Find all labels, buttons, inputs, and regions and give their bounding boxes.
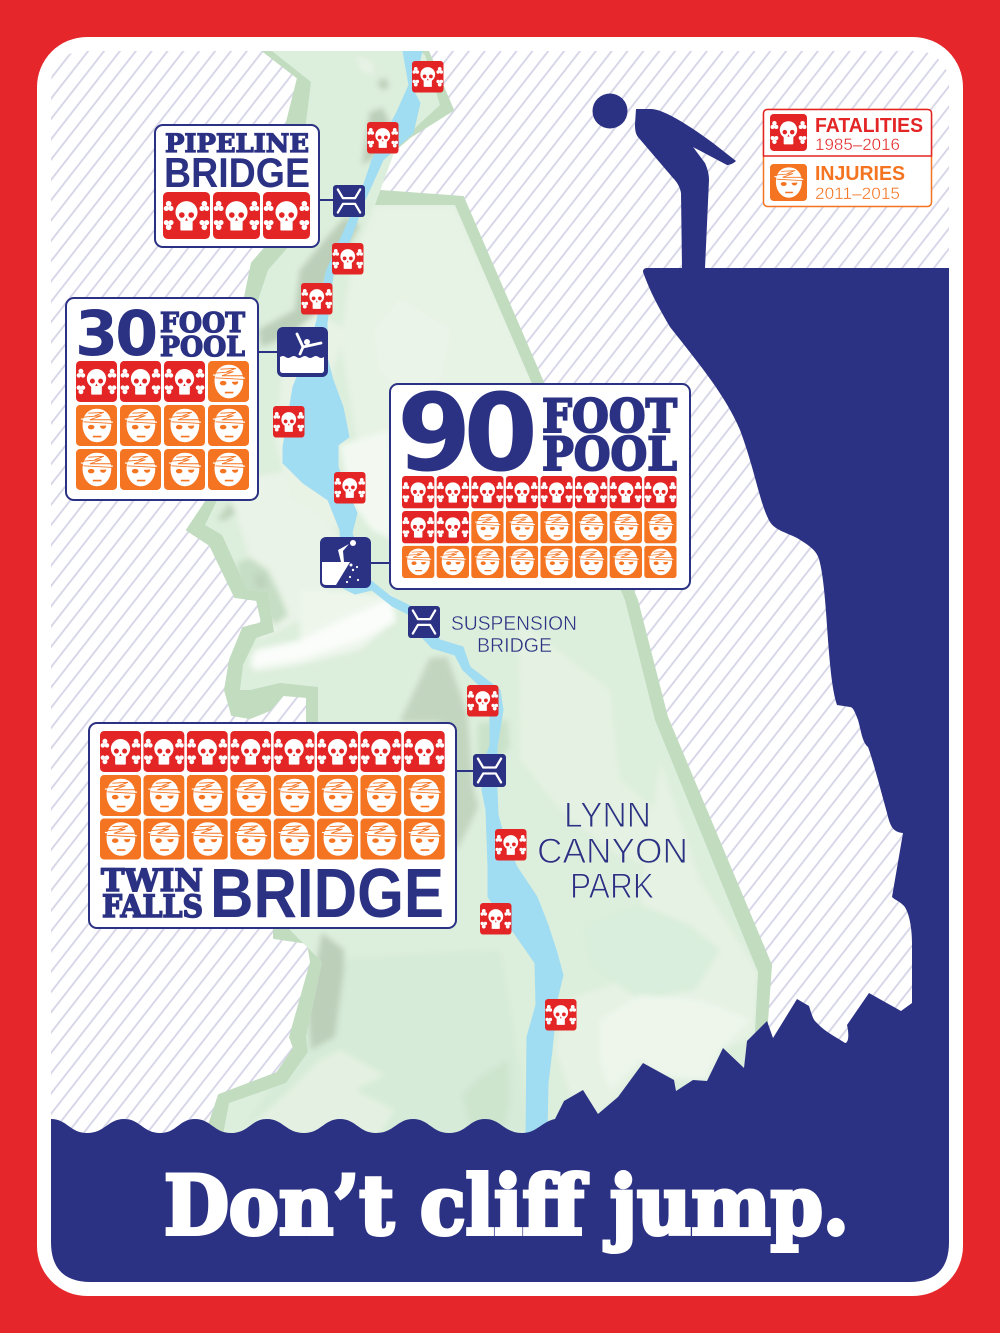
- heading: 30: 30: [75, 297, 156, 370]
- heading: Bridge: BRIDGE: [164, 149, 310, 196]
- connector: 30 Foot Pool: [258, 351, 278, 353]
- label: Lynn Canyon Park: [537, 796, 688, 906]
- icon: swimmer in pool: [277, 327, 328, 377]
- icon: Suspension Bridge marker: [408, 606, 440, 638]
- title: Don’t cliff jump.: [164, 1159, 849, 1254]
- connector: 90 Foot Pool: [371, 562, 391, 564]
- icons: 8 fatalities and 16 injuries: [100, 731, 445, 860]
- icon: cliff diver: [320, 537, 371, 588]
- hatched sky background: [51, 51, 949, 1151]
- legend fatalities years: 1985–2016: [815, 136, 900, 154]
- connector: Pipeline Bridge: [319, 199, 334, 201]
- label: Suspension Bridge: SUSPENSION: [451, 613, 577, 635]
- legend injuries years: 2011–2015: [815, 185, 900, 203]
- label: Lynn Canyon Park: CANYON: [537, 832, 688, 871]
- icons: 3 fatalities and 9 injuries: [76, 361, 249, 490]
- panel: 90 Foot Pool: [390, 372, 690, 589]
- label: Suspension Bridge: BRIDGE: [477, 635, 552, 657]
- heading: Falls: FALLS: [102, 889, 203, 925]
- heading: Pipeline: PIPELINE: [165, 129, 309, 158]
- heading: Bridge: BRIDGE: [210, 854, 444, 932]
- legend injuries label: INJURIES: [815, 163, 905, 185]
- icon: Pipeline Bridge marker: [333, 185, 365, 217]
- connector: Twin Falls Bridge: [456, 770, 474, 772]
- heading: 90: 90: [397, 372, 533, 496]
- label: Lynn Canyon Park: LYNN: [564, 796, 651, 835]
- icons: 3 fatalities: [163, 192, 310, 239]
- heading: Pool: POOL: [542, 427, 677, 481]
- legend fatalities icon: [770, 114, 807, 151]
- legend fatalities label: FATALITIES: [815, 115, 923, 137]
- icons: 10 fatalities and 14 injuries: [402, 476, 677, 578]
- heading: Foot: FOOT: [160, 308, 245, 339]
- scattered fatality markers along the river: [273, 61, 576, 1030]
- icon: Twin Falls Bridge marker: [473, 754, 506, 787]
- panel: Pipeline Bridge: [155, 125, 319, 247]
- panel: 30 Foot Pool: [66, 297, 258, 500]
- cliff, rocks and water silhouette: [51, 268, 949, 1282]
- river: [283, 51, 563, 1134]
- heading: Pool: POOL: [160, 332, 245, 363]
- label: Lynn Canyon Park: PARK: [570, 867, 654, 906]
- panel: Twin Falls Bridge: [89, 723, 456, 932]
- map: Lynn Canyon Park terrain: [187, 51, 775, 1140]
- legend: [764, 110, 932, 206]
- heading: Twin: TWIN: [101, 863, 203, 899]
- label: Suspension Bridge: [451, 613, 577, 657]
- diver figure: [592, 94, 736, 268]
- heading: Foot: FOOT: [542, 389, 677, 443]
- legend injuries icon: [770, 164, 807, 201]
